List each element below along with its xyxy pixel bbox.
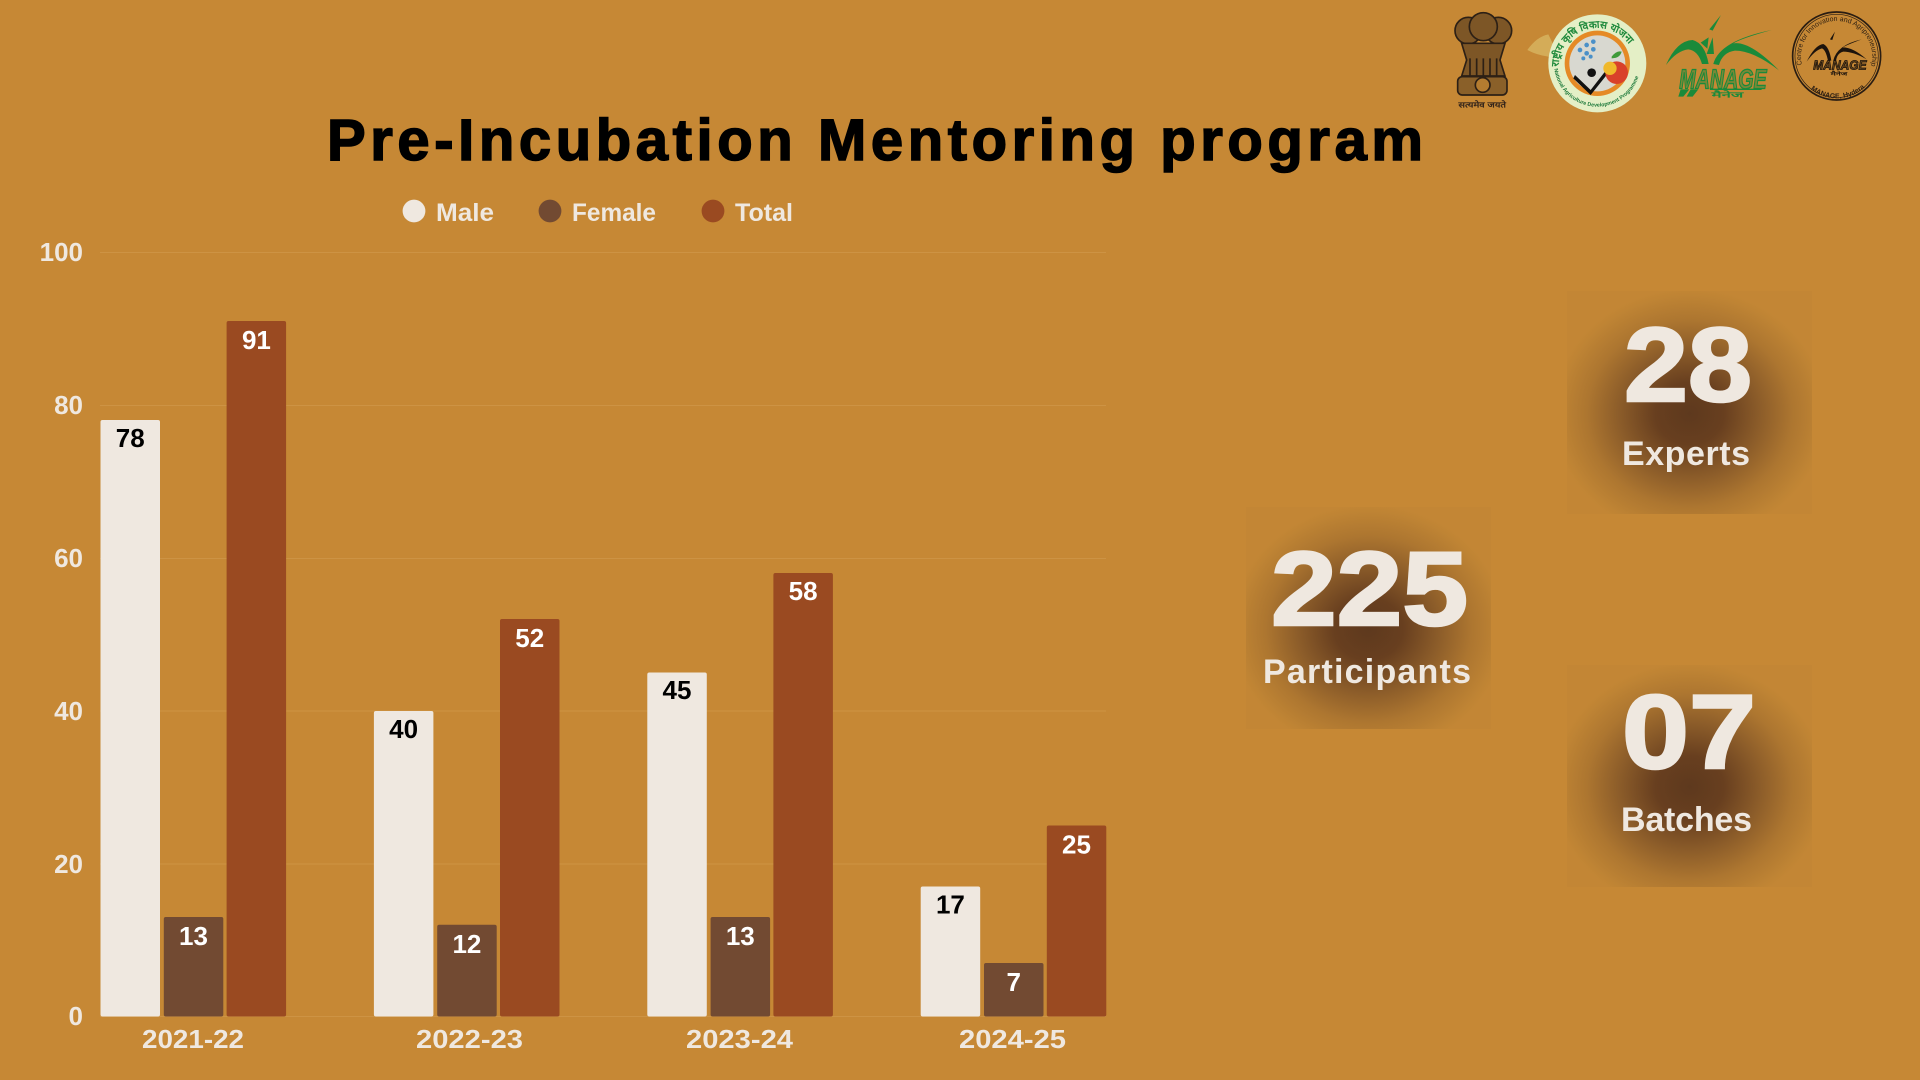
group 2024-25: 17: [936, 890, 965, 920]
title: Pre-Incubation Mentoring program: [327, 108, 1423, 173]
legend: [403, 199, 793, 227]
logo: National Agriculture Development Programme: National Agriculture Development Programme: [1554, 68, 1638, 107]
x axis labels: 2023-24: [686, 1024, 794, 1054]
group 2021-22: 13: [179, 921, 208, 951]
legend: Total: [702, 199, 793, 227]
x axis labels: [142, 1024, 1066, 1054]
logo: National Agriculture Development Programme: राष्ट्रीय कृषि विकास योजना: [1551, 21, 1634, 66]
x axis labels: 2024-25: [959, 1024, 1066, 1054]
bar chart: [40, 237, 1106, 1054]
y axis labels: [40, 237, 83, 1031]
logo: National Agriculture Development Programme: [1528, 14, 1646, 112]
group 2024-25: [921, 826, 1106, 1016]
group 2022-23: [374, 619, 560, 1016]
group 2023-24: 58: [789, 576, 818, 606]
x axis labels: 2021-22: [142, 1024, 244, 1054]
y axis labels: 80: [54, 390, 83, 420]
logo: MANAGE: [1666, 15, 1779, 99]
y axis labels: 100: [40, 237, 83, 267]
logo: MANAGE: MANAGE: [1679, 63, 1767, 94]
logo: Centre for Innovation and Agripreneurship: MANAGE: [1813, 57, 1868, 72]
group 2023-24: 13: [726, 921, 755, 951]
y axis labels: 60: [54, 543, 83, 573]
stat: 07 Batches: Batches: [1621, 801, 1752, 839]
y axis labels: 40: [54, 696, 83, 726]
group 2022-23: 40: [389, 714, 418, 744]
stat: 28 Experts: [1567, 291, 1812, 514]
group 2022-23: 52: [515, 623, 544, 653]
group 2023-24: [647, 573, 833, 1016]
logo: Centre for Innovation and Agripreneurship: [1792, 11, 1882, 101]
group 2021-22: 78: [116, 423, 145, 453]
x axis labels: 2022-23: [416, 1024, 523, 1054]
logo: national emblem: [1455, 13, 1512, 109]
group 2023-24: 45: [663, 675, 691, 705]
stat: 225 Participants: 225: [1271, 531, 1468, 648]
group 2021-22: 91: [242, 325, 271, 355]
y axis labels: 0: [69, 1001, 83, 1031]
legend: Total: Total: [735, 199, 793, 227]
stat: 28 Experts: 28: [1624, 307, 1752, 424]
stat: 28 Experts: Experts: [1622, 435, 1750, 473]
legend: Male: [403, 199, 494, 227]
logo: national emblem: सत्यमेव जयते: [1457, 99, 1507, 109]
legend: Male: Male: [436, 199, 494, 227]
stat: 225 Participants: [1246, 507, 1491, 729]
group 2022-23: 12: [452, 929, 481, 959]
logo: Centre for Innovation and Agripreneurship: मैनेज: [1829, 70, 1849, 77]
group 2024-25: 25: [1062, 830, 1091, 860]
group 2024-25: 7: [1006, 967, 1021, 997]
logos row: [1454, 11, 1882, 112]
legend: Female: Female: [572, 199, 656, 227]
stat: 07 Batches: [1567, 665, 1812, 887]
group 2021-22: [100, 321, 286, 1016]
stat: 07 Batches: 07: [1622, 674, 1756, 791]
stat: 225 Participants: Participants: [1263, 653, 1471, 691]
logo: MANAGE: मैनेज: [1710, 89, 1746, 99]
y axis labels: 20: [54, 849, 83, 879]
